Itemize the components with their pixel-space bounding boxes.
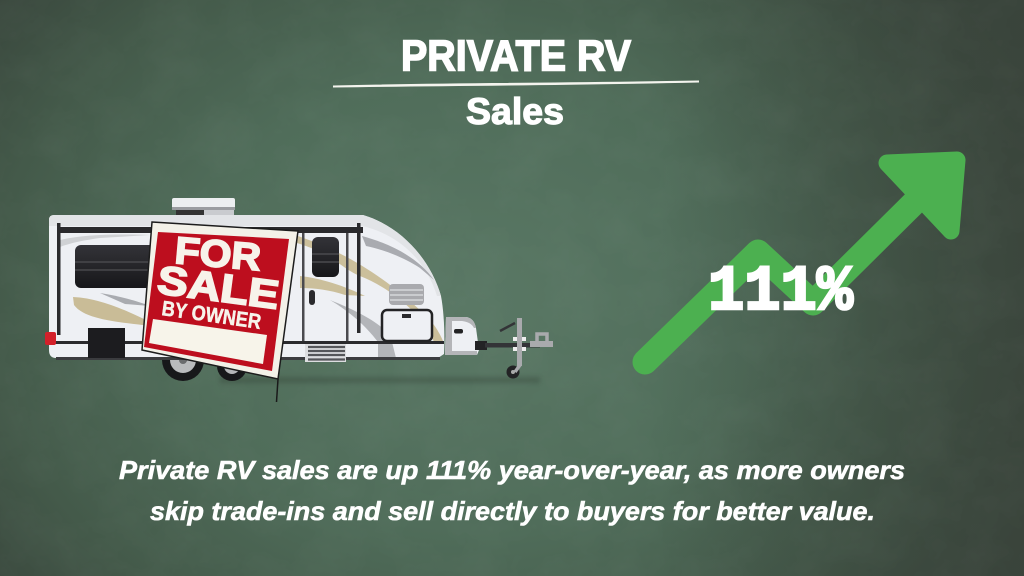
red panel <box>144 232 289 371</box>
trailer body <box>49 215 444 358</box>
door handle <box>309 290 315 305</box>
awning rail and arms <box>57 223 363 343</box>
sign board <box>142 222 298 379</box>
side window <box>75 245 165 288</box>
description text <box>119 455 905 526</box>
storage compartment <box>382 310 432 341</box>
blank name field <box>149 319 267 364</box>
ground shadow <box>220 377 540 383</box>
title: Private RV: PRIVATE RV <box>401 32 632 80</box>
description line 1: Private RV sales are up 111% year-over-year, as more owners <box>119 455 905 485</box>
wheels <box>162 339 247 381</box>
text: BY OWNER: BY OWNER <box>160 297 263 334</box>
rear wheel-side box <box>88 328 125 358</box>
arrow shaft <box>645 192 925 362</box>
hitch cover <box>445 317 479 355</box>
jack stand and wheel <box>500 318 526 378</box>
entry steps <box>305 344 346 362</box>
door window <box>312 237 339 277</box>
subtitle: Sales: Sales <box>466 91 564 132</box>
arrow head <box>887 160 957 231</box>
description line 2: skip trade-ins and sell directly to buyers for better value. <box>150 496 875 526</box>
statistic: 111%: 111% <box>708 257 854 329</box>
beltline <box>52 341 444 344</box>
for sale by owner sign <box>142 222 298 402</box>
body swooshes <box>60 232 444 358</box>
lower skirt <box>56 357 440 360</box>
tow bar and coupler <box>475 334 553 350</box>
growth arrow <box>645 160 957 362</box>
text: FOR: FOR <box>173 230 263 279</box>
chalk divider under title <box>333 80 699 88</box>
roof edge <box>49 215 441 296</box>
sign post <box>276 379 278 402</box>
RV trailer illustration with for-sale sign <box>45 198 553 402</box>
tail light <box>45 332 56 345</box>
text: SALE: SALE <box>155 258 282 318</box>
front vent <box>389 284 424 305</box>
roof air conditioner <box>172 198 235 216</box>
